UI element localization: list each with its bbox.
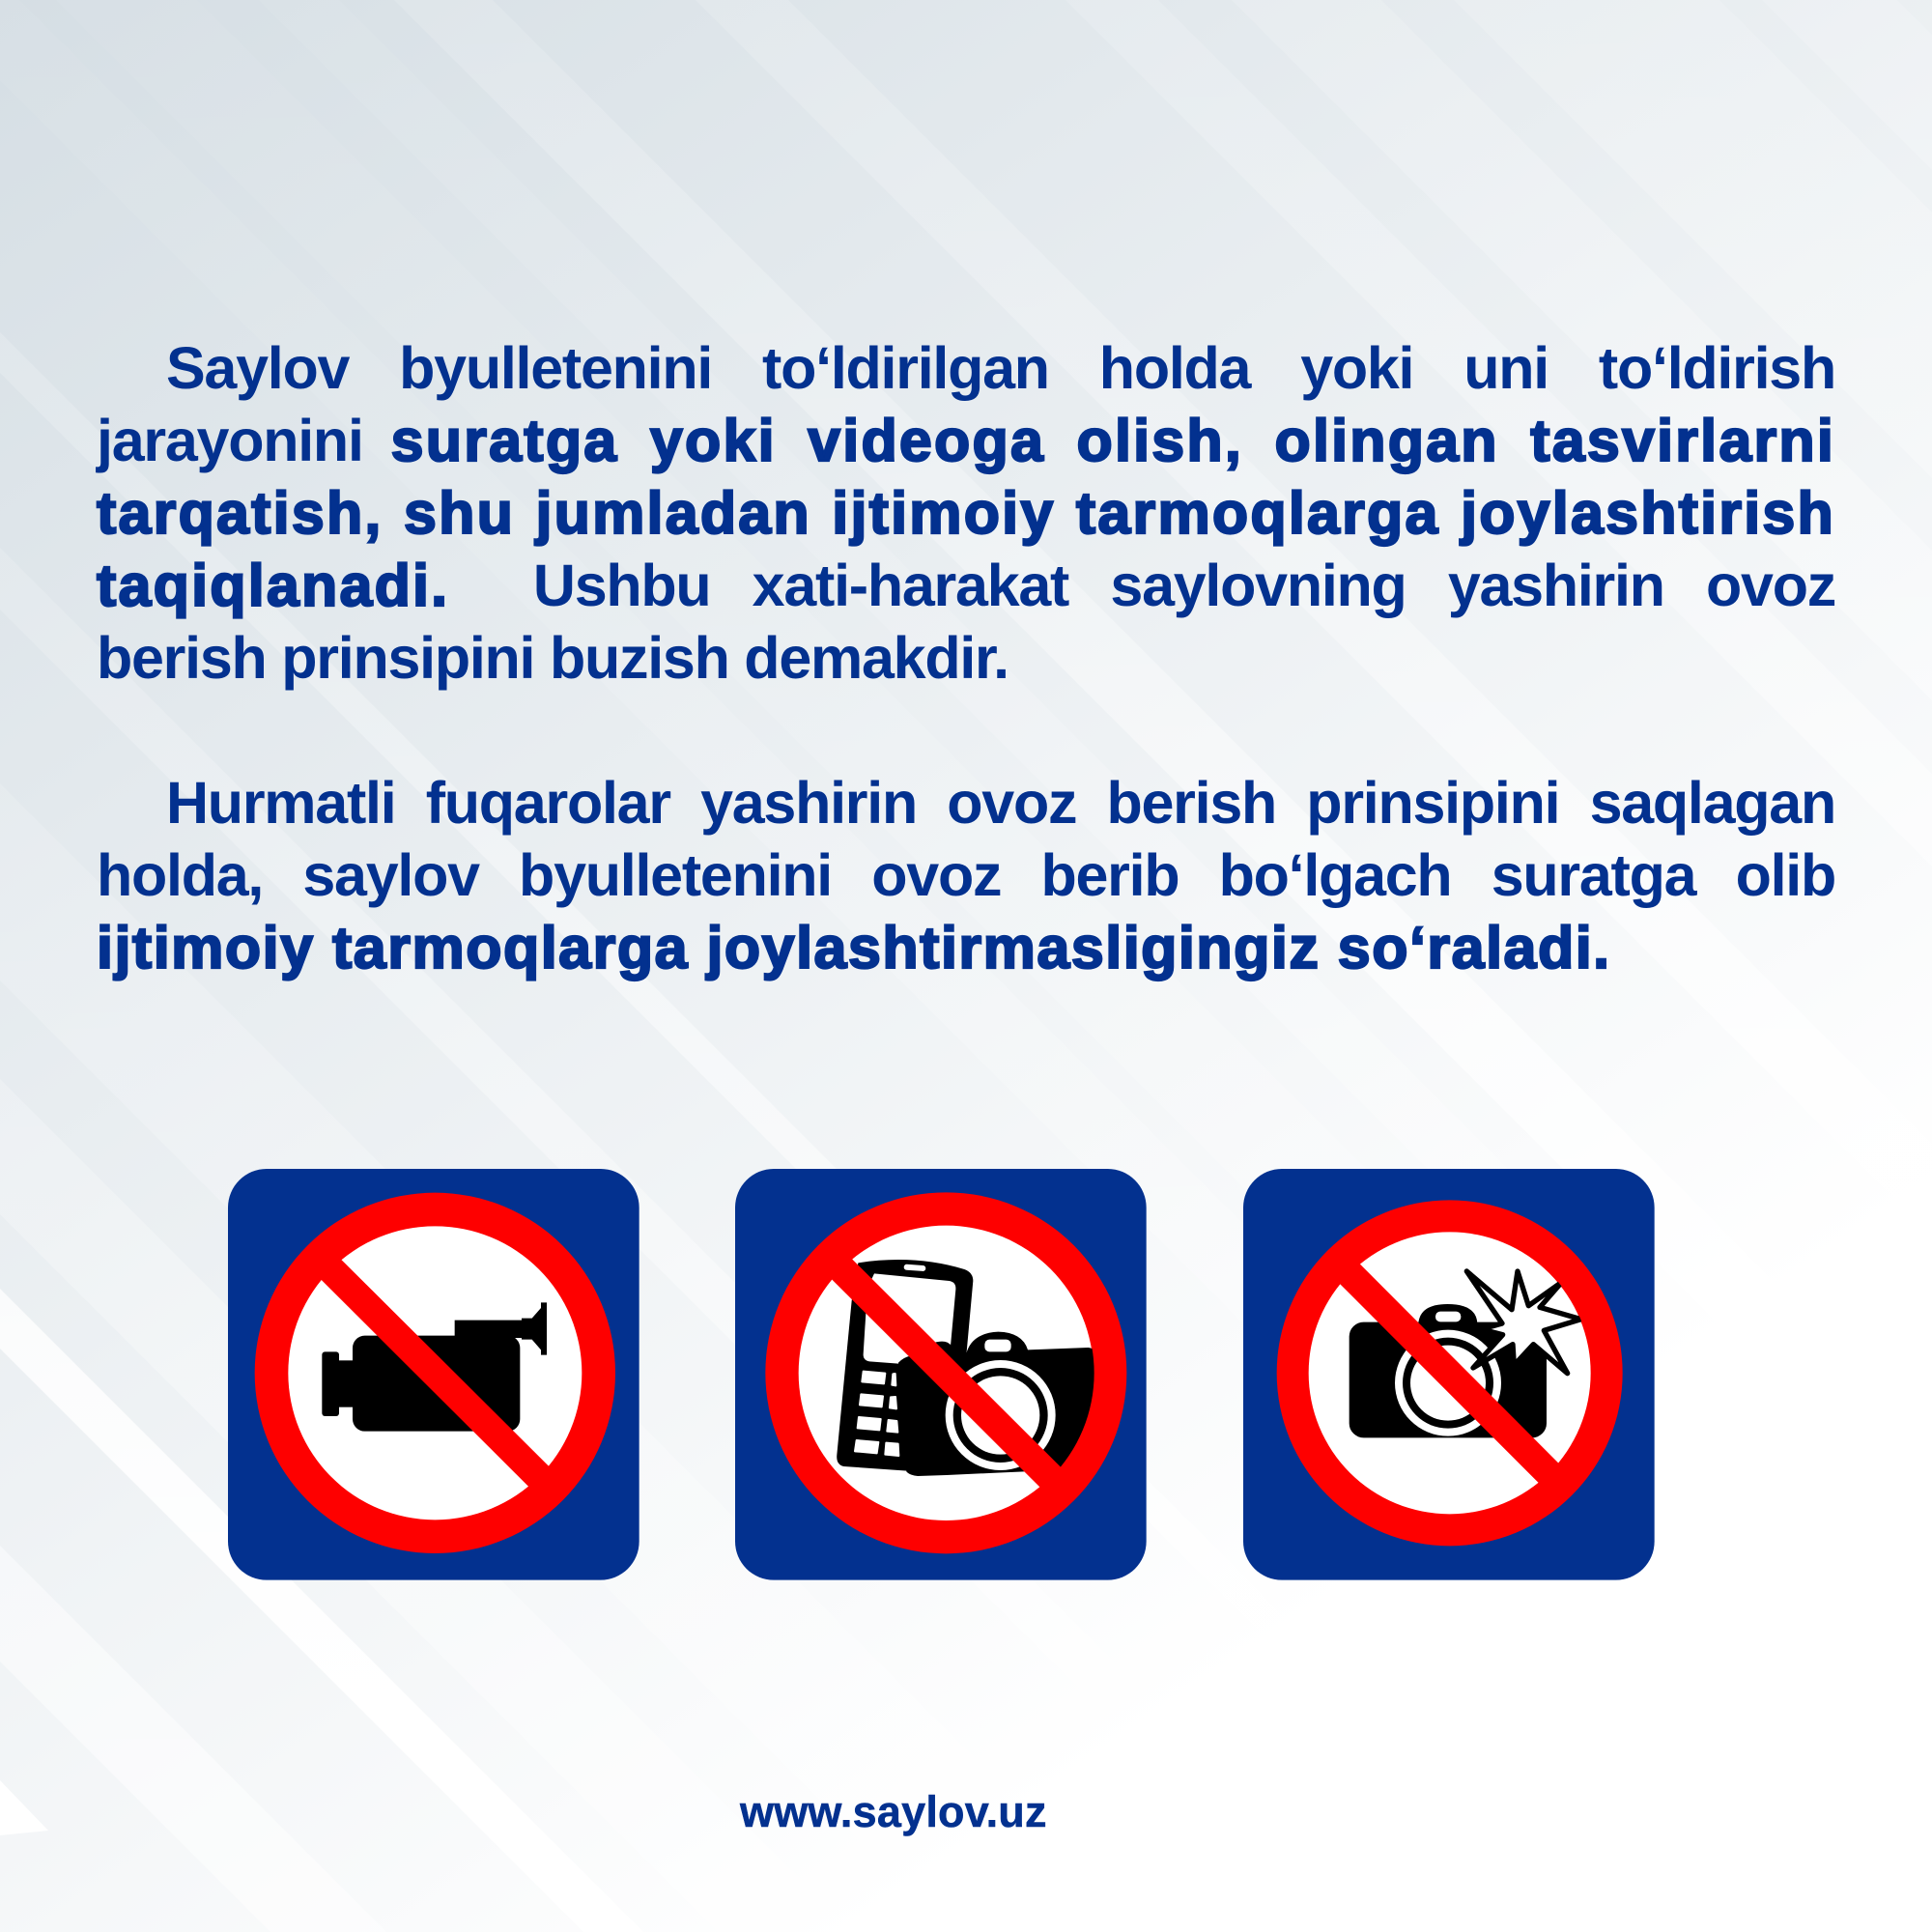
footer url: www.saylov.uz <box>740 1787 1047 1836</box>
paragraph 1: taqiqlanadi. Ushbu xati-harakat saylovning yashirin ovoz <box>97 553 1835 618</box>
icon: no camera with flash <box>1243 1169 1655 1580</box>
paragraph 2: ijtimoiy tarmoqlarga joylashtirmasligingiz so‘raladi. <box>97 915 1611 980</box>
paragraph 2 <box>97 770 1835 981</box>
paragraph 2: holda, saylov byulletenini ovoz berib bo‘lgach suratga olib <box>97 842 1835 908</box>
icon: no phone and camera <box>735 1169 1147 1580</box>
paragraph 1: Saylov byulletenini to‘ldirilgan holda yoki uni to‘ldirish <box>166 335 1835 401</box>
paragraph 2: Hurmatli fuqarolar yashirin ovoz berish prinsipini saqlagan <box>166 770 1835 836</box>
icons: prohibited video, phone and camera signs <box>228 1169 1655 1580</box>
paragraph 1 <box>96 335 1835 691</box>
paragraph 1: tarqatish, shu jumladan ijtimoiy tarmoqlarga joylashtirish <box>97 480 1835 546</box>
paragraph 1: berish prinsipini buzish demakdir. <box>97 625 1009 691</box>
paragraph 1: jarayonini suratga yoki videoga olish, olingan tasvirlarni <box>97 408 1835 473</box>
icon: no video camera <box>228 1169 639 1580</box>
